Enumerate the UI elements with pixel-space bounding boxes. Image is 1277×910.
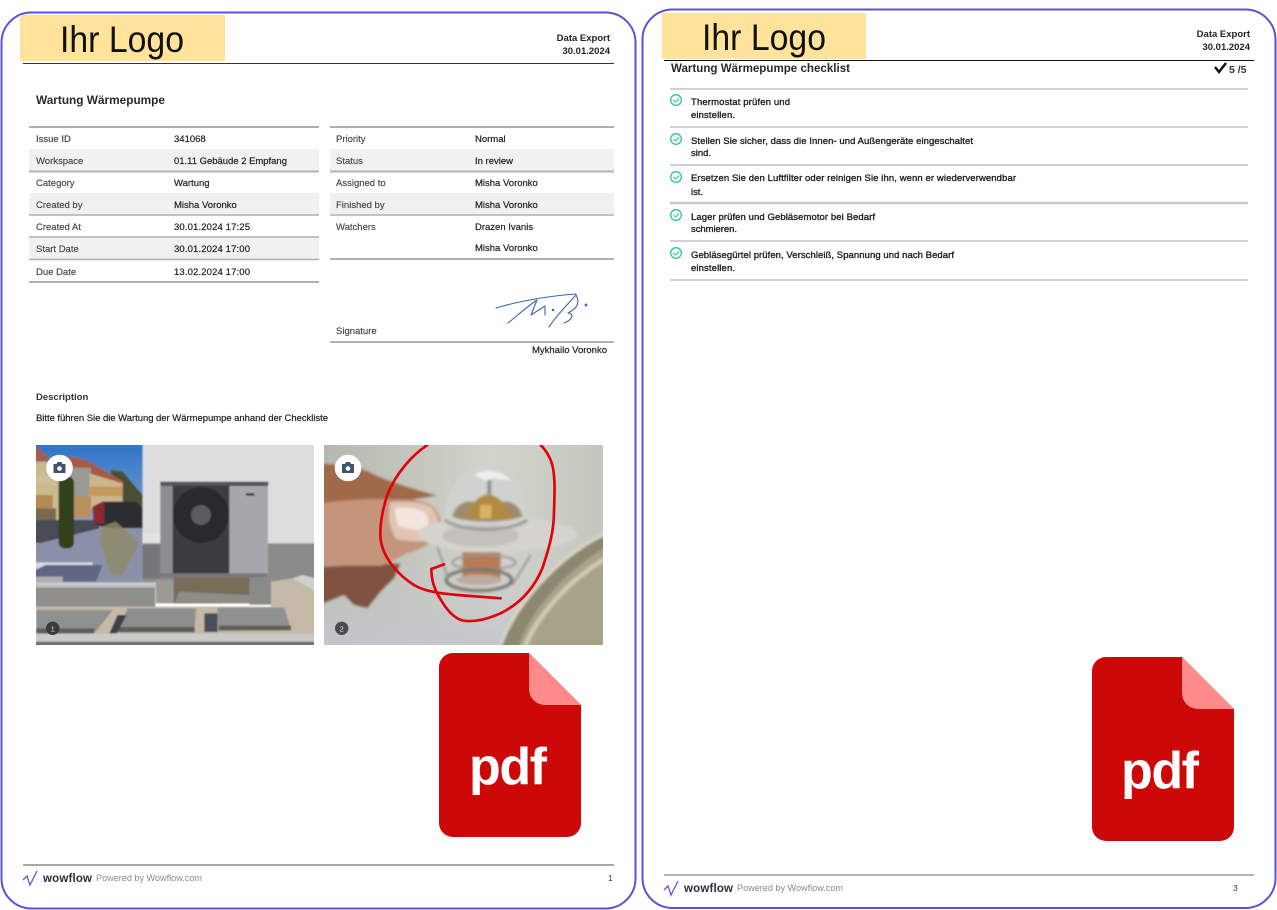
item 3	[671, 172, 1016, 198]
table: issue details right: Watchers	[336, 222, 376, 233]
icon: pdf file page 3	[1092, 657, 1234, 841]
table: issue details left: 341068	[174, 134, 206, 145]
export label: page 3: 30.01.2024	[1202, 42, 1251, 53]
table: issue details right: Status	[336, 156, 363, 167]
red hand-drawn circle	[380, 445, 555, 621]
table: issue details right: In review	[475, 156, 513, 167]
table: issue details right: Normal	[475, 134, 506, 145]
item 5: einstellen.	[691, 263, 735, 274]
footer: page 1: 1	[608, 873, 613, 883]
table: issue details right: Assigned to	[336, 178, 386, 189]
photo number badge 1: 1	[51, 624, 55, 634]
footer: page 3: Powered by Wowflow.com	[737, 883, 843, 893]
photo number badge 2	[335, 622, 348, 635]
item 4	[671, 210, 875, 235]
signature block	[330, 294, 614, 356]
panel: page 3	[642, 10, 1276, 908]
item 2: sind.	[691, 148, 711, 159]
heading: checklist title: Wartung Wärmepumpe checklist	[671, 61, 850, 75]
table: issue details right: Drazen Ivanis	[475, 222, 533, 233]
item 1: einstellen.	[691, 110, 735, 121]
signature block: Signature	[336, 326, 377, 337]
footer: page 1: wowflow	[42, 873, 92, 885]
table: issue details right: Misha Voronko	[475, 200, 538, 211]
export label: page 1: Data Export	[557, 33, 611, 44]
footer: page 1: Powered by Wowflow.com	[96, 873, 202, 883]
table: issue details right: Misha Voronko	[475, 243, 538, 254]
item 5	[671, 248, 954, 274]
table: issue details left: 30.01.2024 17:25	[174, 222, 250, 233]
photo number badge 2: 2	[340, 624, 344, 634]
footer: page 3	[664, 875, 1254, 895]
photo: outdoor heat pump unit	[33, 442, 317, 648]
description text: Description	[36, 392, 88, 403]
checklist items	[670, 89, 1248, 280]
icon: camera badge	[46, 455, 73, 481]
description text: Bitte führen Sie die Wartung der Wärmepumpe anhand der Checkliste	[36, 413, 328, 424]
item 2: Stellen Sie sicher, dass die Innen- und Außengeräte eingeschaltet	[691, 136, 973, 147]
item 2	[671, 134, 973, 159]
item 4: schmieren.	[691, 224, 737, 235]
table: issue details left: Start Date	[36, 244, 79, 255]
table: issue details left: Wartung	[174, 178, 210, 189]
logo placeholder: page 1: Ihr Logo	[60, 19, 184, 60]
checklist progress counter: 5 /5	[1229, 64, 1247, 76]
icon: camera badge	[335, 455, 361, 481]
table: issue details left: Created by	[36, 200, 83, 211]
table: issue details right: Misha Voronko	[475, 178, 538, 189]
footer: page 3: 3	[1233, 883, 1238, 893]
table: issue details left: Due Date	[36, 267, 76, 278]
item 3: ist.	[691, 187, 703, 198]
icon: wowflow mark	[664, 881, 678, 895]
table: issue details left: 30.01.2024 17:00	[174, 244, 250, 255]
table: issue details left: Category	[36, 178, 75, 189]
table: issue details left: Created At	[36, 222, 81, 233]
photo number badge 1	[46, 622, 59, 635]
table: issue details left: 13.02.2024 17:00	[174, 267, 250, 278]
footer: page 1	[23, 865, 614, 885]
icon: pdf file page 3: pdf	[1121, 742, 1200, 800]
icon: wowflow mark	[23, 871, 37, 885]
item 3: Ersetzen Sie den Luftfilter oder reinigen Sie ihn, wenn er wiederverwendbar	[691, 173, 1016, 184]
icon: pdf file page 1: pdf	[469, 738, 548, 796]
table: issue details left	[29, 127, 319, 282]
description text	[36, 392, 328, 424]
item 1	[671, 95, 790, 121]
table: issue details right: Priority	[336, 134, 366, 145]
export label: page 1: 30.01.2024	[562, 46, 611, 57]
footer: page 3: wowflow	[683, 883, 733, 895]
table: issue details left: Issue ID	[36, 134, 71, 145]
panel: page 1	[2, 12, 636, 908]
table: issue details right: Finished by	[336, 200, 385, 211]
photo: thermostat with red marking	[321, 442, 606, 648]
logo placeholder: page 3: Ihr Logo	[702, 17, 826, 58]
logo placeholder: page 3	[662, 13, 866, 59]
icon: pdf file page 1	[439, 653, 581, 837]
table: issue details left: 01.11 Gebäude 2 Empfang	[174, 156, 287, 167]
icon: handwritten signature	[496, 294, 587, 327]
heading: report title: Wartung Wärmepumpe	[36, 93, 165, 107]
export label: page 3	[1197, 29, 1251, 53]
item 4: Lager prüfen und Gebläsemotor bei Bedarf	[691, 212, 875, 223]
export label: page 1	[557, 33, 611, 57]
logo placeholder: page 1	[20, 15, 225, 61]
item 5: Gebläsegürtel prüfen, Verschleiß, Spannung und nach Bedarf	[691, 250, 954, 261]
export label: page 3: Data Export	[1197, 29, 1251, 40]
item 1: Thermostat prüfen und	[691, 97, 790, 108]
signature block: Mykhailo Voronko	[532, 345, 607, 356]
table: issue details left: Workspace	[36, 156, 83, 167]
checklist progress counter	[1215, 63, 1247, 76]
table: issue details left: Misha Voronko	[174, 200, 237, 211]
table: issue details right	[330, 127, 614, 259]
